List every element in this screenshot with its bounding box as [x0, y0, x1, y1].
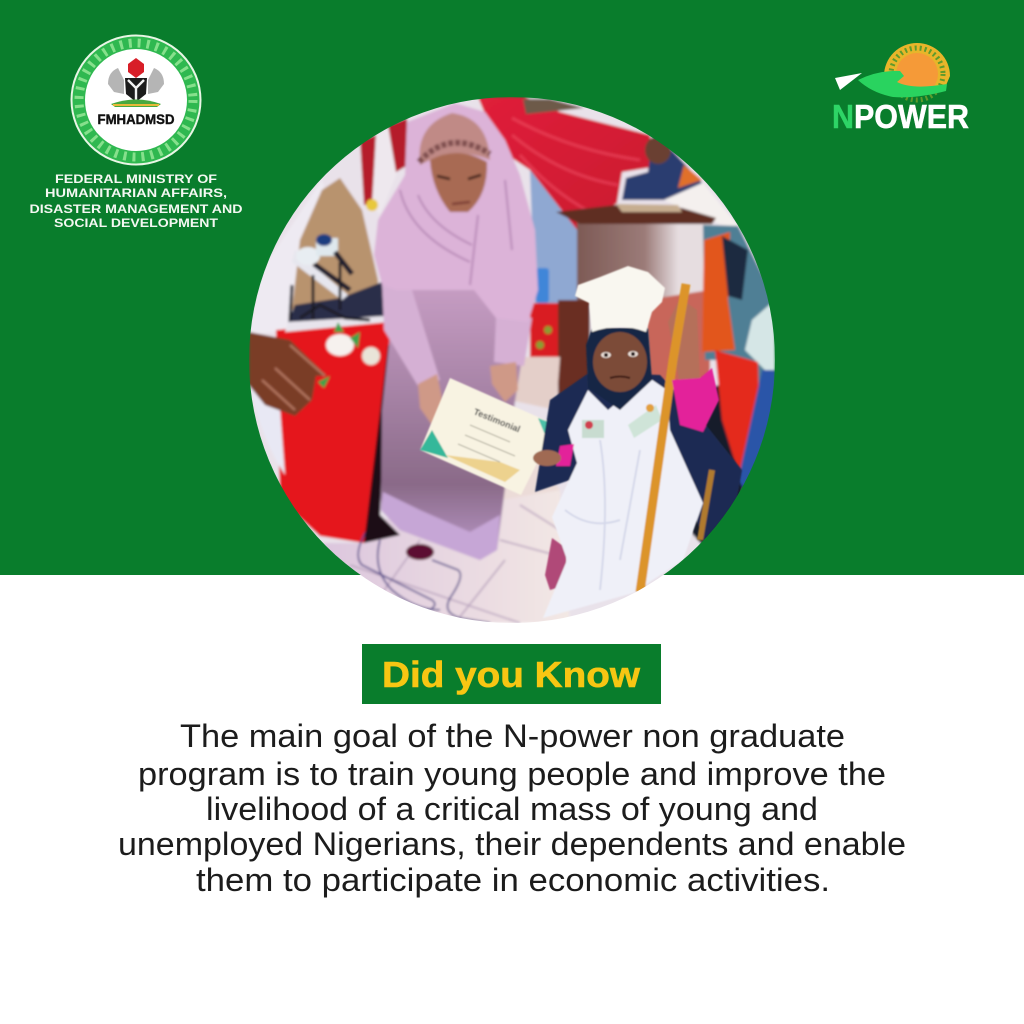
- white table edge: [285, 316, 388, 332]
- face: [593, 332, 647, 392]
- wordmark: NPOWER: [832, 98, 969, 135]
- certificate: [420, 378, 556, 495]
- white wing: [835, 73, 862, 90]
- guest hands: [249, 332, 327, 416]
- circular photo: certificate presentation: [249, 97, 775, 623]
- guest in gold lace: [292, 178, 378, 310]
- floor cables: [358, 528, 490, 623]
- white cloth lower left: [250, 388, 285, 475]
- ministry name: FEDERAL MINISTRY OF: [55, 172, 217, 186]
- apron badges: [582, 404, 662, 438]
- water bottle: [536, 268, 549, 303]
- dress lower hem lace: [381, 492, 500, 560]
- dark table clutter: [288, 282, 384, 322]
- white robe at left: [252, 188, 321, 332]
- white board behind podium: [665, 184, 736, 226]
- table flowers: [318, 322, 380, 388]
- photo backdrop: [249, 97, 775, 623]
- dark robe right of chef: [692, 384, 744, 544]
- headscarf: [586, 328, 652, 410]
- certificate title: Testimonial: [472, 407, 522, 434]
- ministry logo: [70, 34, 202, 166]
- white apron: [543, 377, 703, 618]
- body paragraph: livelihood of a critical mass of young and: [206, 791, 818, 827]
- chef hat: [575, 266, 665, 332]
- sun: [896, 53, 938, 95]
- body paragraph: them to participate in economic activities.: [196, 862, 830, 898]
- ministry name: DISASTER MANAGEMENT AND: [30, 202, 243, 216]
- logo acronym: FMHADMSD: [98, 111, 174, 127]
- glass podium: [556, 204, 716, 305]
- chef trainee: [533, 266, 742, 618]
- framed picture on wall: [523, 99, 584, 114]
- green header background: [0, 0, 1024, 575]
- green hand: [858, 71, 947, 97]
- dress: [381, 290, 525, 560]
- red stage drape: [478, 97, 653, 230]
- lower hand and cuff: [533, 444, 574, 466]
- pink cuff: [672, 368, 719, 432]
- dark gap beside table: [364, 345, 400, 543]
- hijab: [374, 103, 538, 322]
- eyes and mouth: [601, 351, 638, 378]
- right sleeve: [494, 318, 532, 366]
- logo outer ring: [70, 34, 202, 166]
- white lower background: [0, 575, 1024, 1024]
- tiled floor: [322, 490, 570, 623]
- shoe: [406, 544, 434, 560]
- under cap: [419, 113, 490, 165]
- body paragraph: The main goal of the N-power non graduate: [180, 718, 845, 754]
- npower logo: [832, 43, 969, 135]
- coat of arms: [108, 58, 164, 107]
- thin walking stick behind: [700, 470, 712, 540]
- ministry name: HUMANITARIAN AFFAIRS,: [45, 186, 227, 200]
- ministry name: SOCIAL DEVELOPMENT: [54, 216, 219, 230]
- red jacket and blue patterned cloth: [715, 350, 775, 490]
- logo inner disc: [85, 49, 187, 151]
- flags behind: [360, 118, 408, 215]
- red table and dark wood behind chef: [510, 300, 590, 410]
- cap braid: [419, 143, 490, 162]
- drape folds: [512, 118, 640, 212]
- background guest: [622, 136, 702, 200]
- woman hands: [418, 362, 518, 425]
- body paragraph: [118, 718, 906, 898]
- orange staff: [640, 284, 686, 592]
- floor right of dress: [504, 464, 559, 499]
- peach and red area behind raised arm: [646, 290, 712, 382]
- body paragraph: program is to train young people and improve the: [138, 756, 886, 792]
- face: [430, 153, 487, 212]
- right side guest in orange and teal: [701, 223, 775, 386]
- blue back panel: [530, 170, 577, 305]
- navy jacket: [535, 372, 742, 545]
- badge heading: Did you Know: [382, 654, 641, 695]
- eyes and mouth: [437, 175, 481, 204]
- apron folds: [565, 440, 640, 590]
- microphones: [290, 234, 370, 320]
- woman presenter: [374, 103, 538, 560]
- body paragraph: unemployed Nigerians, their dependents and enable: [118, 826, 906, 862]
- left sleeve: [382, 280, 440, 386]
- did you know badge: [362, 644, 661, 704]
- red table cloth: [276, 320, 392, 543]
- ministry name: [30, 172, 243, 230]
- colourful skirt: [545, 538, 566, 590]
- logo patterned band: [79, 43, 193, 157]
- hijab folds: [400, 180, 512, 285]
- sun rays: [884, 43, 950, 90]
- raised arm: [668, 298, 700, 385]
